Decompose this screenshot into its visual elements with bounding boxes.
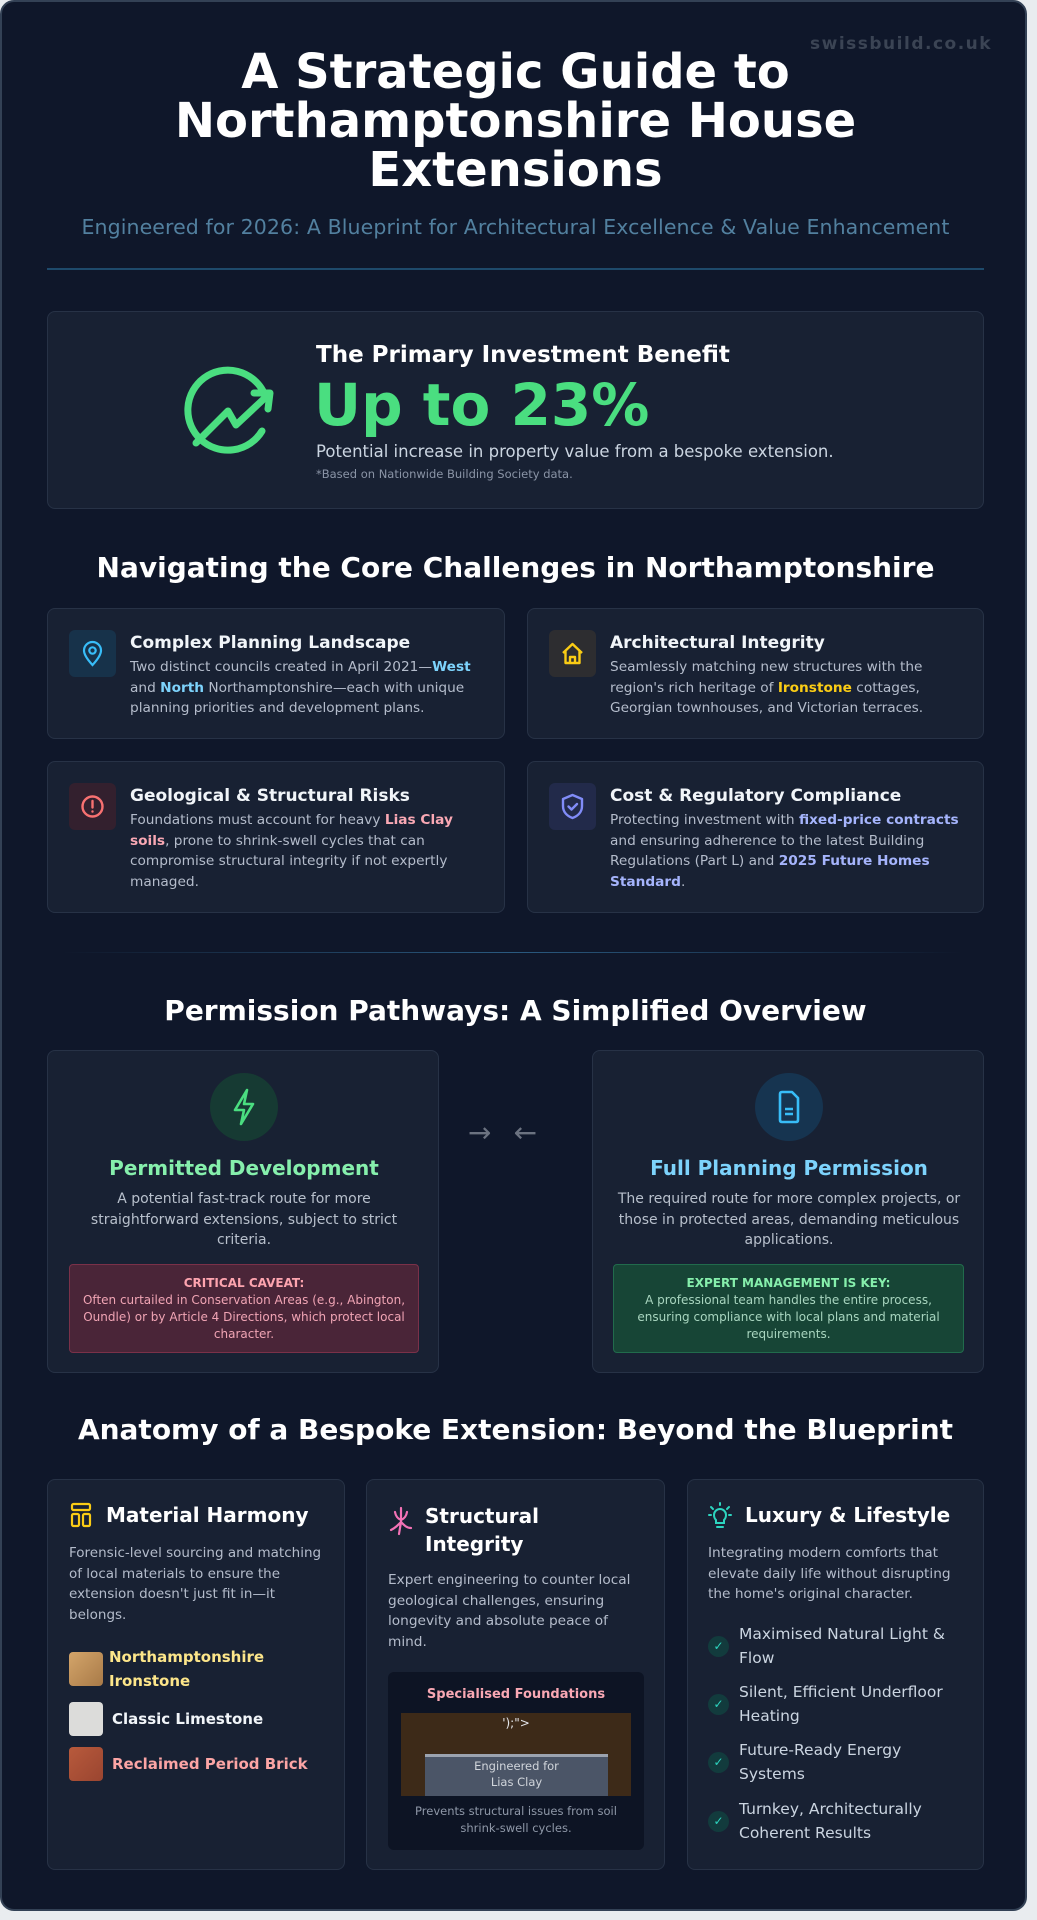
title: A Strategic Guide to [241,44,790,100]
panel: geological risks: Foundations must account for heavy Lias Clay soils, prone to shrink-swell cycles that can compromise structural integrity if not expertly managed. [130,812,453,890]
panel: full planning permission [592,1050,984,1373]
list: lifestyle features: Future-Ready Energy [739,1741,901,1759]
panel: material harmony: Forensic-level sourcing and matching of local materials to ensure the extension doesn't just fit in—it belongs. [69,1545,321,1623]
panel: material harmony: Material Harmony [106,1503,309,1527]
swatch: ironstone [69,1648,264,1690]
panel: structural integrity: Integrity [425,1532,523,1556]
panel: structural integrity [366,1479,665,1870]
swatch: limestone: Classic Limestone [112,1710,263,1728]
panel: luxury lifestyle: Luxury & Lifestyle [745,1503,950,1527]
callout: expert management: EXPERT MANAGEMENT IS KEY: [687,1276,890,1290]
icon: layout [70,1502,92,1528]
diagram: specialised foundations: Prevents structural issues from soil [415,1804,617,1818]
panel: architectural integrity: Seamlessly matching new structures with the region's rich heritage of Ironstone cottages, Georgian townhouses, and Victorian terraces. [610,659,923,716]
description: Potential increase in property value from a bespoke extension. [316,442,834,461]
footnote: *Based on Nationwide Building Society data. [316,467,573,481]
swatch: brick [69,1747,308,1781]
heading: The Primary Investment Benefit [316,342,730,368]
list: lifestyle features: Maximised Natural Light & [739,1625,945,1643]
panel: material harmony [47,1479,345,1870]
callout: critical caveat: CRITICAL CAVEAT: [184,1276,304,1290]
panel: geological risks [47,761,505,913]
swatch: limestone [69,1702,263,1736]
list: lifestyle features: Heating [739,1707,800,1725]
list: lifestyle features: Flow [739,1649,774,1667]
list: lifestyle features: Systems [739,1765,805,1783]
panel: architectural integrity: Architectural Integrity [610,633,825,653]
panel: full planning permission: Full Planning Permission [650,1156,928,1180]
icon: lightbulb [708,1502,732,1528]
arrows: →← [468,1116,559,1149]
panel: permitted development: Permitted Development [109,1156,379,1180]
panel: primary investment benefit [47,311,984,509]
list: lifestyle features: ✓ [713,1639,724,1653]
panel: structural integrity: Expert engineering to counter local geological challenges, ensuring longevity and absolute peace of mind. [388,1572,630,1650]
swatch: ironstone: Northamptonshire [109,1648,264,1666]
diagram: specialised foundations: ');"> [502,1716,530,1730]
panel: complex planning: Two distinct councils created in April 2021—West and North Northamptonshire—each with unique planning priorities and development plans. [130,659,471,716]
panel: cost compliance: Protecting investment with fixed-price contracts and ensuring adherence to the latest Building Regulations (Part L) and 2025 Future Homes Standard. [610,812,959,890]
panel: cost compliance: Cost & Regulatory Compliance [610,786,901,806]
panel: complex planning: Complex Planning Landscape [130,633,410,653]
swatch: brick: Reclaimed Period Brick [112,1755,308,1773]
big stat: Up to 23% [314,371,649,439]
icon: document [755,1073,823,1141]
title: Extensions [368,142,663,198]
panel: structural integrity: Structural [425,1504,539,1528]
subtitle: Engineered for 2026: A Blueprint for Architectural Excellence & Value Enhancement [81,215,950,239]
callout: critical caveat: Often curtailed in Conservation Areas (e.g., Abington, Oundle) or by Article 4 Directions, which protect local character. [83,1293,405,1341]
icon: house [549,630,596,677]
panel: permitted development: A potential fast-track route for more straightforward extensions, subject to strict criteria. [91,1191,397,1248]
callout: expert management: A professional team handles the entire process, ensuring compliance with local plans and material requirements. [637,1293,940,1341]
list: lifestyle features [708,1625,945,1842]
watermark: swissbuild.co.uk [810,34,992,54]
panel: luxury lifestyle [687,1479,984,1870]
diagram: specialised foundations: shrink-swell cycles. [460,1821,572,1835]
icon: shield [549,783,596,830]
panel: full planning permission: The required route for more complex projects, or those in protected areas, demanding meticulous applications. [618,1191,960,1248]
icon: roots [390,1506,412,1536]
swatch: ironstone: Ironstone [109,1672,190,1690]
title: Northamptonshire House [175,93,856,149]
diagram: specialised foundations: Lias Clay [491,1775,542,1789]
title [175,44,856,198]
panel: luxury lifestyle: Integrating modern comforts that elevate daily life without disrupting the home's original character. [708,1545,951,1602]
list: lifestyle features: ✓ [713,1697,724,1711]
panel: architectural integrity [527,608,984,739]
list: lifestyle features: Silent, Efficient Underfloor [739,1683,943,1701]
panel: complex planning [47,608,505,739]
icon: growth circle [184,366,274,454]
panel: geological risks: Geological & Structural Risks [130,786,410,806]
callout: critical caveat [69,1264,419,1353]
diagram: specialised foundations [388,1672,644,1850]
callout: expert management [613,1264,964,1353]
heading: permission pathways: Permission Pathways: A Simplified Overview [164,994,867,1027]
list: lifestyle features: ✓ [713,1755,724,1769]
panel: cost compliance [527,761,984,913]
heading: challenges: Navigating the Core Challenges in Northamptonshire [97,551,934,584]
list: lifestyle features: Coherent Results [739,1824,871,1842]
icon: location [69,630,116,677]
heading: anatomy: Anatomy of a Bespoke Extension: Beyond the Blueprint [78,1413,953,1446]
list: lifestyle features: Turnkey, Architecturally [739,1800,922,1818]
panel: permitted development [47,1050,439,1373]
diagram: specialised foundations: Engineered for [474,1759,559,1773]
icon: alert [69,783,116,830]
icon: lightning [210,1073,278,1141]
list: lifestyle features: ✓ [713,1814,724,1828]
diagram: specialised foundations: Specialised Foundations [427,1687,605,1702]
